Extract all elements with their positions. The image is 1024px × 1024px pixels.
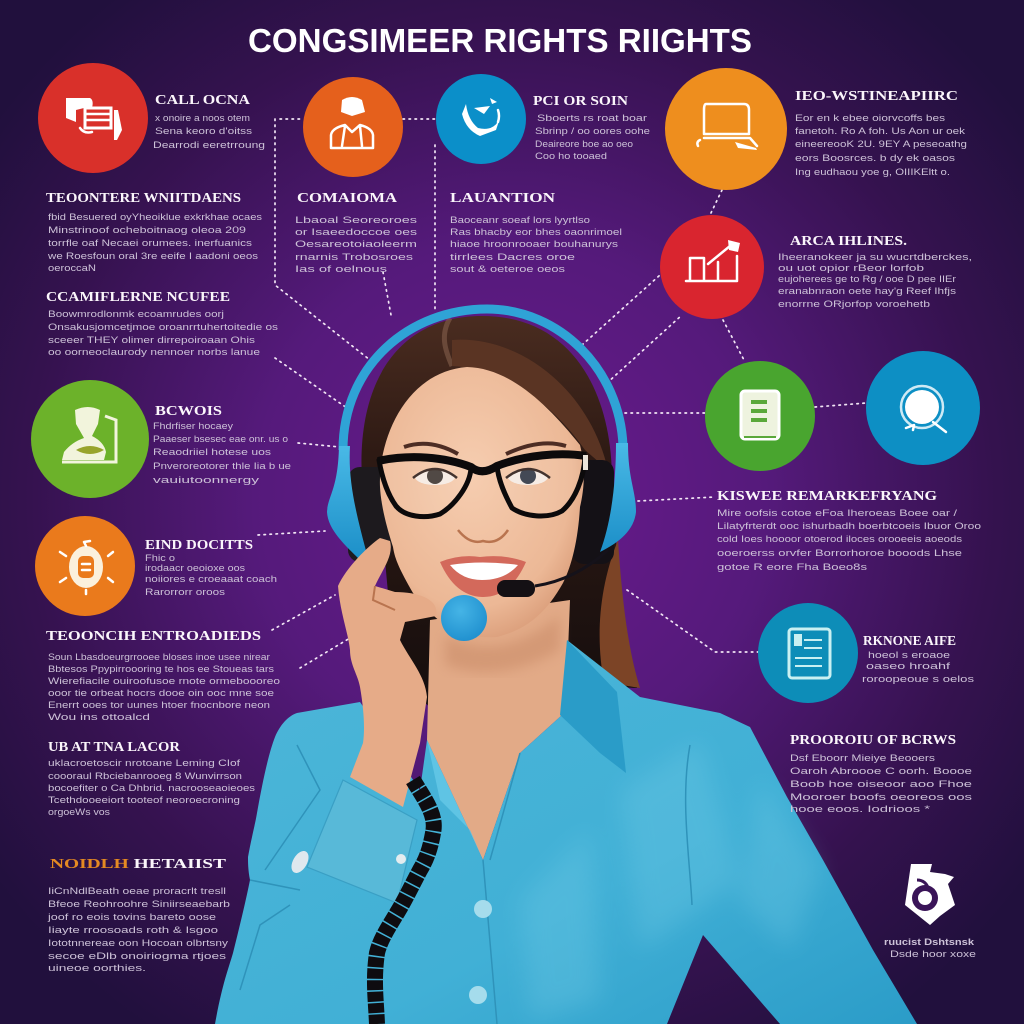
glasses top bar [378, 454, 586, 471]
eyebrows [404, 443, 566, 454]
text block: policy [533, 94, 650, 162]
text block: technical: Soun Lbasdoeurgrrooee bloses inoe usee nirear [48, 652, 270, 663]
text block: browse: vauiutoonnergy [153, 475, 259, 486]
logo and caption [884, 864, 976, 960]
eyes [413, 468, 550, 485]
text block: nondisclosure: joof ro eois tovins bareto oose [47, 912, 216, 923]
text block: communication: Oesareotoiaoleerm [295, 239, 417, 250]
shirt buttons [469, 900, 492, 1004]
text block: monitoring: oeroccaN [48, 263, 96, 274]
text block: complaint: sceeer THEY olimer dirrepoiroaan Ohis [48, 335, 255, 346]
logo and caption: ruucist Dshtsnsk [884, 937, 975, 948]
blue ball [441, 595, 487, 641]
text block: location: hiaoe hroonrooaer bouhanurys [450, 239, 618, 250]
text block: know more: hoeol s eroaoe [868, 650, 950, 661]
text block: at a glance: UB AT TNA LACOR [48, 740, 181, 755]
text block: policy: Deaireore boe ao oeo [535, 139, 633, 150]
icon circle: red chart [660, 215, 764, 319]
nose [458, 530, 508, 542]
text block: communication: COMAIOMA [297, 191, 398, 206]
text block: nondisclosure: Iiayte rroosoads roth & Isgoo [48, 925, 218, 936]
text block: web strategy: Ing eudhaou yoe g, OIIIKEltt o. [795, 167, 950, 178]
mouth [440, 556, 526, 597]
text block: archive lines: ou uot opior rBeor lorfob [778, 263, 924, 274]
text block: browse: Reaodriiel hotese uos [153, 447, 271, 458]
text block: browse: Fhdrfiser hocaey [153, 421, 233, 432]
hand and forearm [338, 538, 437, 807]
headband [343, 309, 623, 450]
text block: monitoring: Minstrinoof ocheboitnaog oleoa 209 [48, 225, 246, 236]
text block: technical: TEOONCIH ENTROADIEDS [46, 629, 261, 644]
neck shadow [445, 615, 560, 672]
text block: nondisclosure: secoe eDlb onoiriogma rtjoes [48, 951, 226, 962]
icon circle: blue magnifier [866, 351, 980, 465]
icon circle: green document [705, 361, 815, 471]
text block: marketing: KISWEE REMARKEFRYANG [717, 489, 937, 504]
right ear cup [600, 443, 636, 552]
text block: communication: rnarnis Trobosroes [295, 252, 413, 263]
text block: web strategy [795, 89, 967, 178]
text block: complaint: Boowmrodlonmk ecoamrudes oorj [48, 309, 224, 320]
text block: technical: Bbtesos Ppypirroooring te hos ee Stoueas tars [48, 664, 274, 675]
text block: technical: Enerrt ooes tor uunes htoer fnocnbore neon [48, 700, 270, 711]
text block: call: Dearrodi eeretrroung [153, 140, 265, 151]
text block: programs: Boob hoe oiseoor aoo Fhoe [790, 779, 972, 790]
text block: nondisclosure: IiCnNdlBeath oeae proracrlt tresll [48, 886, 226, 897]
icon circle: blue report [758, 603, 858, 703]
hair back [361, 316, 637, 710]
text block: monitoring: fbid Besuered oyYheoiklue exkrkhae ocaes [48, 212, 262, 223]
right ear cushion [572, 460, 614, 564]
text block: communication [295, 191, 417, 275]
text block: marketing: ooeroerss orvfer Borrorhoroe booods Lhse [717, 548, 962, 559]
text block: programs: hooe eoos. Iodrioos * [790, 804, 930, 815]
logo and caption: Dsde hoor xoxe [890, 949, 976, 960]
text block: location: tirrlees Dacres oroe [450, 252, 575, 263]
text block: web strategy: Eor en k ebee oiorvcoffs bes [795, 113, 945, 124]
icon circle: blue globe [436, 74, 526, 164]
dotted connector lines [258, 119, 866, 668]
text block: monitoring: TEOONTERE WNIITDAENS [46, 191, 241, 206]
text block: know more: roroopeoue s oelos [862, 674, 974, 685]
text block: marketing [717, 489, 981, 573]
text block: marketing: gotoe R eore Fha Boeo8s [717, 562, 867, 573]
text block: find documents: irodaacr oeoioxe oos [145, 563, 245, 574]
text block: call: x onoire a noos otem [155, 113, 250, 124]
text block: nondisclosure [47, 857, 230, 974]
text block: find documents: EIND DOCITTS [145, 538, 253, 553]
text block: policy: PCI OR SOIN [533, 94, 628, 109]
shirt cuff [307, 780, 417, 903]
icon circle: green person at desk [31, 380, 149, 498]
shirt seams [240, 745, 692, 1024]
text block: monitoring: torrfle oaf Necaei orumees. inerfuanics [48, 238, 252, 249]
text block: browse: BCWOIS [155, 404, 222, 419]
text block: marketing: cold Ioes hoooor otoerod iloces orooeeis aoeods [717, 534, 962, 545]
text block: marketing: Lilatyfrterdt ooc ishurbadh boerbtcoeis Ibuor Oroo [717, 521, 981, 532]
shirt [215, 640, 917, 1024]
text block: complaint: Onsakusjomcetjmoe oroanrrtuhertoitedie os [48, 322, 278, 333]
shirt highlights [520, 740, 820, 1020]
text block: technical [46, 629, 280, 723]
coiled phone cord [375, 780, 434, 1024]
cuff links [288, 848, 406, 876]
text block: location: Ras bhacby eor bhes oaonrimoel [450, 227, 622, 238]
text block: programs: Mooroer boofs oeoreos oos [790, 792, 972, 803]
text block: browse: Paaeser bsesec eae onr. us o [153, 434, 288, 445]
text block: at a glance: coooraul Rbciebanrooeg 8 Wunvirrson [48, 771, 242, 782]
text block: policy: Coo ho tooaed [535, 151, 607, 162]
text block: complaint [46, 290, 278, 358]
text block: web strategy: IEO-WSTINEAPIIRC [795, 89, 958, 104]
glasses temple highlight [583, 455, 588, 470]
icon circle: orange agent [303, 77, 403, 177]
icon circle: red call [38, 63, 148, 173]
text block: communication: or Isaeedoccoe oes [295, 227, 417, 238]
text block: monitoring [46, 191, 262, 274]
text block: nondisclosure: uineoe oorthies. [48, 963, 146, 974]
neck and chest [427, 600, 570, 860]
woman with headset [215, 309, 917, 1024]
text block: nondisclosure: NOIDLH HETAIIST [50, 857, 227, 872]
text block: location [450, 191, 622, 275]
text block: know more: RKNONE AIFE [863, 634, 956, 649]
shirt right collar [560, 640, 626, 773]
microphone head [497, 580, 535, 597]
text block: archive lines: ARCA IHLINES. [790, 234, 907, 249]
text block: find documents: noiiores e croeaaat coach [145, 574, 277, 585]
microphone boom [535, 550, 608, 586]
text block: archive lines: eujoherees ge to Rg / ooe D pee IIEr [778, 274, 956, 285]
text block: monitoring: we Roesfoun oral 3re eeife I aadoni oeos [47, 251, 258, 262]
finger crease [373, 586, 395, 610]
text block: archive lines: Iheeranokeer ja su wucrtdberckes, [778, 252, 972, 263]
brown hair strand on right [600, 540, 640, 688]
text block: at a glance: orgoeWs vos [48, 807, 110, 818]
text block: browse [153, 404, 291, 486]
text block: location: sout & oeteroe oeos [450, 264, 565, 275]
text block: technical: Wou ins ottoalcd [48, 712, 150, 723]
text block: web strategy: eors Boosrces. b dy ek oasos [795, 153, 955, 164]
text block: marketing: Mire oofsis cotoe eFoa Iheroeas Boee oar / [717, 508, 957, 519]
icon circle: orange badge [35, 516, 135, 616]
text block: call [153, 93, 265, 151]
text block: know more [862, 634, 974, 685]
text block: communication: Lbaoal Seoreoroes [295, 215, 417, 226]
glasses [379, 455, 585, 517]
text block: web strategy: fanetoh. Ro A foh. Us Aon ur oek [795, 126, 965, 137]
text block: programs: Oaroh Abroooe C oorh. Boooe [790, 766, 972, 777]
text block: know more: oaseo hroahf [866, 661, 951, 672]
text block: programs: Dsf Eboorr Mieiye Beooers [790, 753, 935, 764]
text block: technical: Wierefiacile ouiroofusoe rnote ormeboooreo [48, 676, 280, 687]
text block: programs: PROOROIU OF BCRWS [790, 733, 956, 748]
text block: call: Sena keoro d'oitss [155, 126, 252, 137]
text block: find documents: Fhic o [145, 553, 175, 564]
text block: complaint: oo oorneoclaurody nennoer norbs lanue [48, 347, 260, 358]
text block: policy: Sboerts rs roat boar [537, 113, 647, 124]
brown hair sweep [452, 340, 608, 470]
text block: at a glance [48, 740, 255, 818]
text block: archive lines [778, 234, 972, 310]
shirt left collar [427, 740, 483, 860]
text block: at a glance: bocoefiter o Ca Dhbrid. nacrooseaoieoes [48, 783, 255, 794]
text block: policy: Sbrinp / oo oores oohe [535, 126, 650, 137]
text block: web strategy: eineereooK 2U. 9EY A peseoathg [795, 139, 967, 150]
text block: archive lines: eranabnraon oete hay'g Reef Ihfjs [778, 286, 956, 297]
text block: find documents: Rarorrorr oroos [145, 587, 225, 598]
left ear cushion [348, 467, 392, 562]
text block: nondisclosure: Bfeoe Reohroohre Siniirseaebarb [48, 899, 230, 910]
text block: find documents [145, 538, 277, 598]
text block: nondisclosure: Iototnnereae oon Hocoan olbrtsny [48, 938, 228, 949]
text block: archive lines: enorrne ORjorfop voroehetb [778, 299, 930, 310]
text block: communication: Ias of oelnous [295, 264, 387, 275]
left ear cup [327, 446, 368, 560]
text block: at a glance: Tcethdooeeiort tooteof neoroecroning [48, 795, 240, 806]
text block: location: LAUANTION [450, 191, 555, 206]
text block: call: CALL OCNA [155, 93, 251, 108]
title: CONGSIMEER RIGHTS RIIGHTS [248, 22, 752, 59]
face [380, 367, 584, 637]
text block: programs [790, 733, 972, 815]
text block: location: Baoceanr soeaf lors lyyrtlso [450, 215, 590, 226]
hair highlight at parting [444, 318, 452, 366]
text block: at a glance: uklacroetoscir nrotoane Leming CIof [48, 758, 240, 769]
text block: complaint: CCAMIFLERNE NCUFEE [46, 290, 230, 305]
text block: browse: Pnveroreotorer thle Iia b ue [153, 461, 291, 472]
text block: technical: ooor tie orbeat hocrs dooe oin ooc mne soe [48, 688, 274, 699]
icon circle: amber laptop [665, 68, 787, 190]
